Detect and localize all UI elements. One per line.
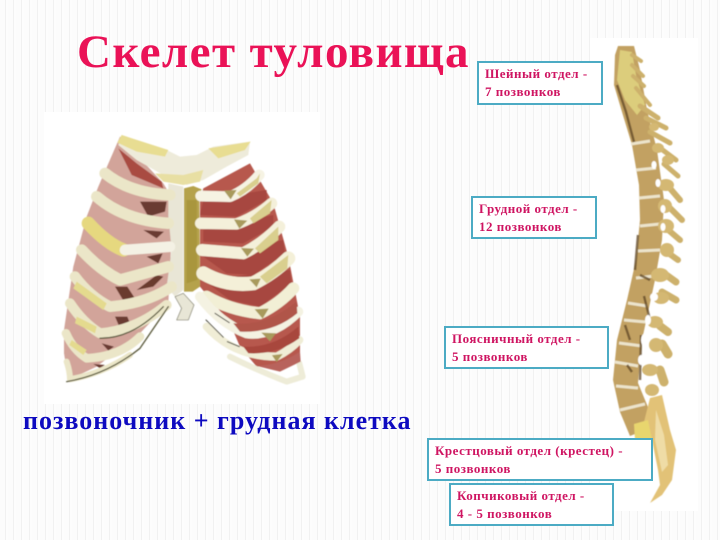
label: cervical: 7 позвонков [485,84,561,98]
vertebral bodies [613,46,664,436]
left muscles [64,137,173,380]
label: cervical [477,61,603,105]
label: sacral [427,438,653,481]
label: thoracic: 12 позвонков [479,218,562,234]
illustration: spine [597,38,694,511]
label: cervical: Шейный отдел - [485,66,588,81]
label: sacral: Крестцовый отдел (крестец) - [435,443,623,458]
lower right muscles [233,302,297,332]
right muscles [200,163,300,367]
label: thoracic [471,196,597,239]
label: lumbar: 5 позвонков [452,348,528,364]
upper neck highlight [617,50,645,115]
upper clavicle area [118,135,250,185]
foramina [638,161,666,365]
title: Скелет туловища [77,26,470,78]
illustration: rib cage [45,112,318,404]
label: lumbar: Поясничный отдел - [452,331,581,346]
sacrum and coccyx [642,395,676,503]
label: coccygeal: Копчиковый отдел - [457,488,585,503]
costal cartilage dots [224,190,283,362]
sternum centre [167,183,183,297]
label: sacral: 5 позвонков [435,460,511,476]
lower right ribs [200,297,303,382]
left ribs [66,173,172,379]
spinous and articular processes [632,55,682,382]
right ribs [201,175,293,313]
label: coccygeal: 4 - 5 позвонков [457,506,552,520]
xiphoid [175,293,194,320]
dark dashes [206,313,239,347]
spinal discs [615,141,660,410]
label: coccygeal [449,483,614,526]
dark shading [617,85,650,380]
caption: позвоночник + грудная клетка [23,406,411,435]
sternum [184,186,202,292]
label: thoracic: Грудной отдел - [479,201,578,216]
label: lumbar [444,326,609,369]
